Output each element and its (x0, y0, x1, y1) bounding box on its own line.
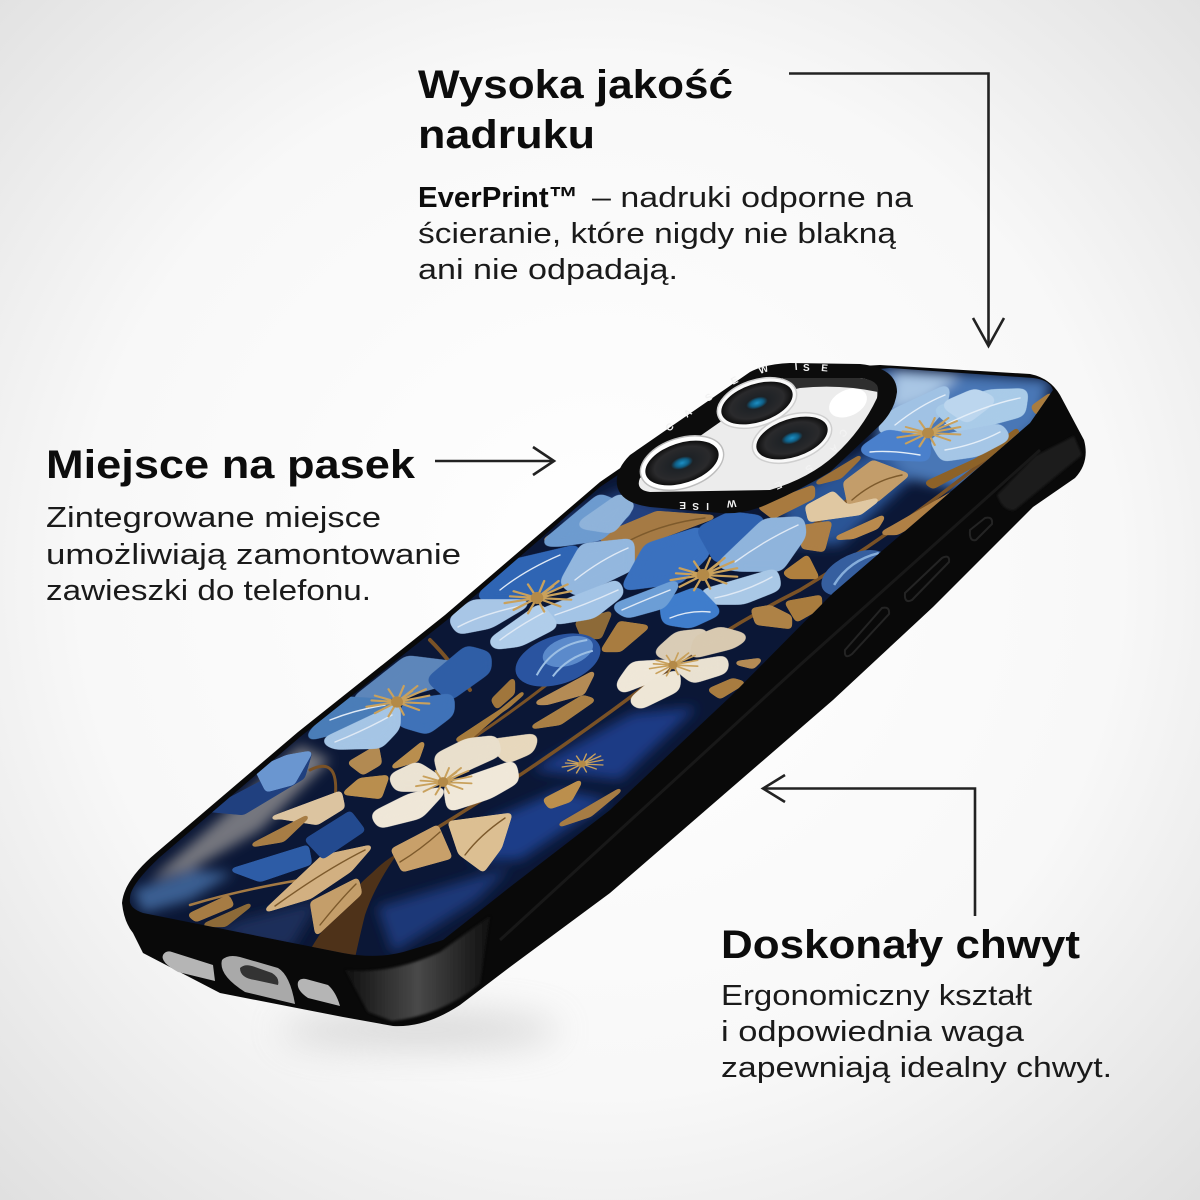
text: strap slot: Zintegrowane miejsce (46, 502, 381, 534)
camera window shadow (775, 378, 878, 394)
heading: grip: Doskonały chwyt (721, 923, 1080, 967)
flower: centre left (452, 542, 631, 646)
side button: upper (905, 557, 949, 601)
text: print quality: EverPrint™ (418, 182, 578, 214)
ring lettering top: I (794, 362, 798, 373)
heading: print quality (418, 63, 733, 157)
flash (824, 383, 872, 423)
stems (190, 440, 1010, 905)
ring lettering top: A (682, 407, 695, 420)
text: strap slot (46, 502, 461, 607)
text: grip: Ergonomiczny kształt (721, 980, 1032, 1012)
text: print quality: ani nie odpadają. (418, 254, 678, 286)
ring lettering bottom: W (726, 497, 737, 509)
ring lettering top: E (821, 363, 829, 375)
ring lettering top: S (803, 363, 810, 374)
ring lettering bottom: C (836, 426, 849, 439)
blue bud (516, 633, 600, 687)
side slot (997, 436, 1082, 510)
heading: print quality: nadruku (418, 113, 595, 157)
dark blue flowers (210, 753, 363, 880)
charging port (221, 956, 295, 1004)
camera ring (617, 363, 897, 513)
flower: upper left partial (545, 497, 632, 543)
text: strap slot: umożliwiają zamontowanie (46, 539, 461, 571)
printed floral artwork (130, 368, 1053, 956)
camera module (617, 362, 897, 513)
flower: lower left (309, 649, 488, 746)
text: print quality (418, 182, 914, 286)
ring lettering top: W (758, 363, 770, 377)
side button: lower (845, 608, 889, 656)
heading: print quality: Wysoka jakość (418, 63, 733, 107)
painted background patches (133, 368, 1050, 953)
lens: top (711, 368, 803, 438)
phone shadow (280, 1010, 560, 1050)
cream flower: small (619, 630, 745, 706)
heading: strap slot: Miejsce na pasek (46, 443, 416, 487)
ring lettering bottom: S (692, 500, 699, 511)
text: grip (721, 980, 1112, 1084)
text: strap slot: zawieszki do telefonu. (46, 575, 371, 607)
blue bud right (821, 550, 881, 595)
ring lettering top: S (703, 391, 715, 404)
trunk (312, 856, 394, 955)
speaker left (163, 951, 215, 981)
lens: right (746, 403, 838, 473)
arrow: strap slot (435, 447, 554, 475)
corner highlight (345, 916, 490, 1021)
arrow: grip (763, 775, 975, 916)
ring lettering bottom: S (803, 462, 815, 475)
text: grip: i odpowiednia waga (721, 1016, 1025, 1048)
ring lettering top: E (729, 375, 741, 388)
phone case (122, 365, 1086, 1026)
ring lettering bottom: I (706, 500, 709, 511)
text: print quality: ścieranie, które nigdy nie blakną (418, 218, 897, 250)
lens: left (633, 426, 731, 500)
side switch (970, 518, 992, 540)
arrow: print quality (789, 74, 1004, 346)
flower: centre right (615, 515, 803, 625)
text: grip: zapewniają idealny chwyt. (721, 1052, 1112, 1084)
case body (122, 365, 1086, 1026)
ring lettering bottom: E (679, 499, 686, 510)
artwork base (130, 368, 1053, 956)
small dark flower (562, 754, 603, 773)
ring lettering bottom: E (772, 478, 783, 491)
text: print quality: – nadruki odporne na (592, 182, 914, 214)
leaf veins (275, 475, 902, 925)
ring lettering bottom: A (828, 442, 840, 455)
flower: top right (862, 388, 1025, 458)
ring lettering top: C (664, 421, 676, 434)
camera window (639, 378, 877, 492)
gold leaves (190, 395, 1053, 933)
speaker right (298, 979, 340, 1006)
side ridge (500, 450, 1040, 940)
cream flower: large (374, 737, 535, 825)
